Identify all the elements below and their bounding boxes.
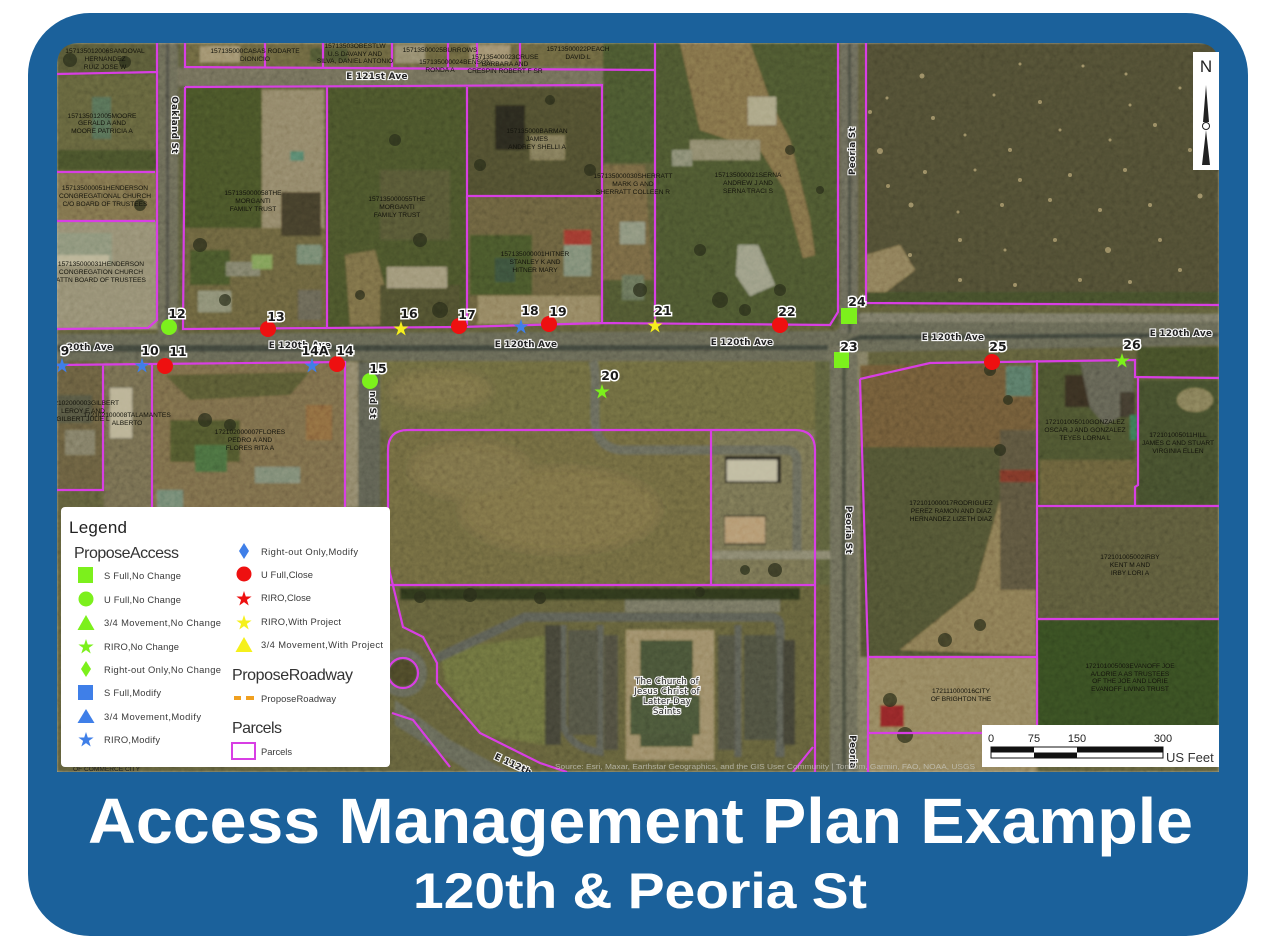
parcel boundaries: [57, 43, 1219, 772]
church label: Latter-Day: [643, 697, 691, 707]
tan shrub dots in field: [868, 62, 1212, 287]
parcel owner labels: MORGANTI: [379, 204, 415, 211]
parcel owner labels: MORGANTI: [235, 198, 271, 205]
access point numbers: [61, 294, 1141, 383]
tone darkening: [57, 43, 1219, 772]
parcel owner labels: RONDA A: [425, 67, 455, 74]
parcel owner labels: 157135000021SERNA: [715, 172, 782, 179]
parcel owner labels: GILBERT JULIE L: [56, 416, 110, 423]
parcel owner labels: 172102000003GILBERT: [47, 400, 119, 407]
parcel owner labels: 15713500022PEACH: [546, 46, 610, 53]
parcel owner labels: PEDRO A AND: [228, 437, 272, 444]
parcel owner labels: HERNANDEZ: [84, 56, 126, 63]
parcel owner labels: OF BRIGHTON THE: [931, 696, 992, 703]
parcel owner labels: FAMILY TRUST: [374, 212, 420, 219]
access point numbers: 23: [840, 339, 858, 354]
access point numbers: 19: [549, 304, 567, 319]
scale bar: 75: [1028, 733, 1040, 745]
parcel owner labels: FLORES RITA A: [226, 445, 275, 452]
parcel owner labels: GERALD A AND: [78, 120, 126, 127]
legend group: ProposeAccess: ProposeAccess: [74, 545, 179, 562]
parcel owner labels: JAMES C AND STUART: [1142, 440, 1214, 447]
access point numbers: 11: [169, 344, 187, 359]
legend group: ProposeAccess: S Full,No Change: [104, 570, 181, 581]
parcel owner labels: OSCAR J AND GONZALEZ: [1044, 427, 1126, 434]
parcel owner labels: 172102000007FLORES: [215, 429, 286, 436]
access point numbers: 14A: [301, 343, 329, 358]
parcel owner labels: ALBERTO: [112, 420, 142, 427]
church label: Saints: [653, 707, 681, 717]
parcel owner labels: U.S DAVANY AND: [328, 51, 382, 58]
church label: Jesus Christ of: [633, 687, 701, 697]
access point numbers: 15: [369, 361, 387, 376]
parcel owner labels: C/O BOARD OF TRUSTEES: [63, 201, 148, 208]
legend group: ProposeAccess: 3/4 Movement,Modify: [104, 711, 201, 722]
legend group: ProposeRoadway: ProposeRoadway: [261, 693, 336, 704]
parcel owner labels: 157135000030SHERRATT: [593, 173, 673, 180]
access point numbers: 12: [168, 306, 186, 321]
tree clusters: [63, 53, 1013, 743]
road labels: E 120th Ave: [495, 340, 557, 350]
scale bar: US Feet: [1166, 750, 1214, 765]
parcel owner labels: FAMILY TRUST: [230, 206, 276, 213]
road labels: Oakland St: [169, 96, 179, 154]
parcel owner labels: IRBY LORI A: [1111, 570, 1150, 577]
parcel owner labels: HITNER MARY: [512, 267, 558, 274]
parcel owner labels: VIRGINIA ELLEN: [1152, 448, 1204, 455]
parcel owner labels: OF THE JOE AND LORIE: [1092, 678, 1168, 685]
parcel owner labels: CONGREGATIONAL CHURCH: [59, 193, 151, 200]
parcel owner labels: HERNANDEZ LIZETH DIAZ: [910, 516, 992, 523]
road labels: E 121st Ave: [346, 72, 408, 82]
access point markers: [54, 308, 1130, 398]
aerial map: [47, 43, 1219, 778]
parcel owner labels: 15713503OBESTLW: [324, 43, 386, 50]
parcel owner labels: EVANOFF LIVING TRUST: [1091, 686, 1169, 693]
legend group: ProposeAccess: U Full,Close: [261, 569, 313, 580]
parcel owner labels: BARBARA AND: [482, 61, 529, 68]
legend group: ProposeAccess: S Full,Modify: [104, 687, 161, 698]
subtitle: 120th & Peoria St: [413, 863, 867, 919]
parcel owner labels: MOORE PATRICIA A: [71, 128, 133, 135]
parcel owner labels: SERNA TRACI S: [723, 188, 774, 195]
small legend-edge label: OF COMMERCE CITY: [73, 766, 141, 773]
access point numbers: 26: [1123, 337, 1141, 352]
legend group: ProposeAccess: 3/4 Movement,With Project: [261, 639, 383, 650]
road labels: E 120th Ave: [1150, 329, 1212, 339]
parcel owner labels: PEREZ RAMON AND DIAZ: [911, 508, 991, 515]
parcel owner labels: RUIZ JOSE W: [84, 64, 127, 71]
church label: The Church of: [634, 677, 700, 687]
scale bar: [982, 725, 1219, 767]
road labels: nd St: [367, 391, 377, 419]
parcel owner labels: 157135000051HENDERSON: [62, 185, 148, 192]
legend group: ProposeAccess: Right-out Only,Modify: [261, 546, 358, 557]
church label: [633, 677, 701, 717]
access point numbers: 25: [989, 339, 1007, 354]
access point numbers: 24: [848, 294, 866, 309]
parcel owner labels: A/LORIE A AS TRUSTEES: [1091, 671, 1170, 678]
legend group: ProposeAccess: RIRO,No Change: [104, 641, 179, 652]
access point numbers: 21: [654, 303, 672, 318]
legend group: ProposeAccess: Right-out Only,No Change: [104, 664, 221, 675]
parcel owner labels: 157135000058THE: [224, 190, 282, 197]
road labels: 20th Ave: [67, 343, 113, 353]
parcel owner labels: TEYES LORNA L: [1059, 435, 1111, 442]
scale bar: 300: [1154, 733, 1172, 745]
parcel owner labels: KENT M AND: [1110, 562, 1150, 569]
access point numbers: 13: [267, 309, 285, 324]
parcel owner labels: ANDREW J AND: [723, 180, 773, 187]
legend group: Parcels: [232, 720, 292, 759]
imagery attribution: Source: Esri, Maxar, Earthstar Geographics, and the GIS User Community | Tomtom, Garmin, FAO, NOAA, USGS: [555, 762, 975, 771]
legend group: Parcels: Parcels: [261, 746, 292, 757]
aerial imagery: [57, 43, 1219, 772]
parcel owner labels: 157135000024BENSON: [419, 59, 491, 66]
legend group: ProposeRoadway: [232, 667, 353, 704]
legend group: ProposeAccess: U Full,No Change: [104, 594, 181, 605]
parcel owner labels: 172101005011HILL: [1149, 432, 1207, 439]
north arrow: N: [1200, 57, 1212, 76]
parcel owner labels: STANLEY K AND: [509, 259, 561, 266]
road labels: E 112th: [493, 752, 533, 778]
image grain: [57, 43, 1219, 772]
parcel owner labels: 157135012005MOORE: [68, 113, 137, 120]
parcel owner labels: 172101005003EVANOFF JOE: [1085, 663, 1175, 670]
parcel owner labels: 157135000CASAS RODARTE: [210, 48, 300, 55]
road labels: [67, 72, 1212, 778]
road labels: Peoria St: [848, 127, 858, 175]
parcel owner labels: MARK G AND: [612, 181, 654, 188]
parcel owner labels: 157135000055THE: [368, 196, 426, 203]
road labels: Peoria: [847, 735, 857, 769]
road labels: E 120th Ave: [922, 333, 984, 343]
parcel owner labels: 15713500025BURROWS: [403, 47, 478, 54]
access point numbers: 22: [778, 304, 796, 319]
parcel owner labels: 172101000017RODRIGUEZ: [909, 500, 993, 507]
road labels: E 120th Ave: [269, 341, 331, 351]
access point numbers: 9: [61, 343, 69, 358]
parcel owner labels: [47, 43, 1214, 703]
parcel owner labels: 172102100008TALAMANTES: [83, 412, 171, 419]
parcel owner labels: SILVA, DANIEL ANTONIO: [317, 58, 393, 65]
scale bar: 150: [1068, 733, 1086, 745]
parcel owner labels: 157135400023CRUSE: [471, 54, 539, 61]
legend group: ProposeAccess: RIRO,Modify: [104, 734, 160, 745]
parcel owner labels: 157135000BARMAN: [506, 128, 568, 135]
parcel owner labels: DIONICIO: [240, 56, 270, 63]
access point numbers: 17: [458, 307, 476, 322]
legend heading: Legend: [69, 518, 127, 537]
parcel owner labels: 172111000016CITY: [932, 688, 991, 695]
legend group: ProposeAccess: RIRO,With Project: [261, 616, 341, 627]
road labels: E 120th Ave: [711, 338, 773, 348]
access point numbers: 20: [601, 368, 619, 383]
legend group: Parcels: Parcels: [232, 720, 282, 737]
scale bar: 0: [988, 733, 994, 745]
access point numbers: 18: [521, 303, 539, 318]
parcel owner labels: JAMES: [526, 136, 549, 143]
legend group: ProposeAccess: RIRO,Close: [261, 592, 311, 603]
parcel owner labels: 172101005002IRBY: [1100, 554, 1160, 561]
parcel owner labels: SHERRATT COLLEEN R: [596, 189, 670, 196]
parcel owner labels: CONGREGATION CHURCH: [59, 269, 143, 276]
parcel owner labels: 157135000001HITNER: [501, 251, 570, 258]
access point numbers: 16: [400, 306, 418, 321]
parcel owner labels: LEROY E AND: [61, 408, 105, 415]
parcel owner labels: 172101005010GONZALEZ: [1045, 419, 1125, 426]
legend group: ProposeRoadway: ProposeRoadway: [232, 667, 353, 684]
parcel owner labels: DAVID L: [565, 54, 591, 61]
legend group: ProposeAccess: [74, 543, 383, 746]
parcel owner labels: 157135000031HENDERSON: [58, 261, 144, 268]
legend: [61, 507, 390, 767]
parcel owner labels: ATTN BOARD OF TRUSTEES: [56, 277, 147, 284]
north arrow: [1193, 52, 1219, 170]
parcel owner labels: CRESPIN ROBERT F SR: [467, 68, 543, 75]
parcel owner labels: ANDREY SHELLI A: [508, 144, 566, 151]
parcel owner labels: 157135012006SANDOVAL: [65, 48, 145, 55]
road labels: Peoria St: [843, 506, 853, 554]
title: Access Management Plan Example: [88, 785, 1193, 857]
access point numbers: 10: [141, 343, 159, 358]
access point numbers: 14: [336, 343, 354, 358]
legend group: ProposeAccess: 3/4 Movement,No Change: [104, 617, 221, 628]
